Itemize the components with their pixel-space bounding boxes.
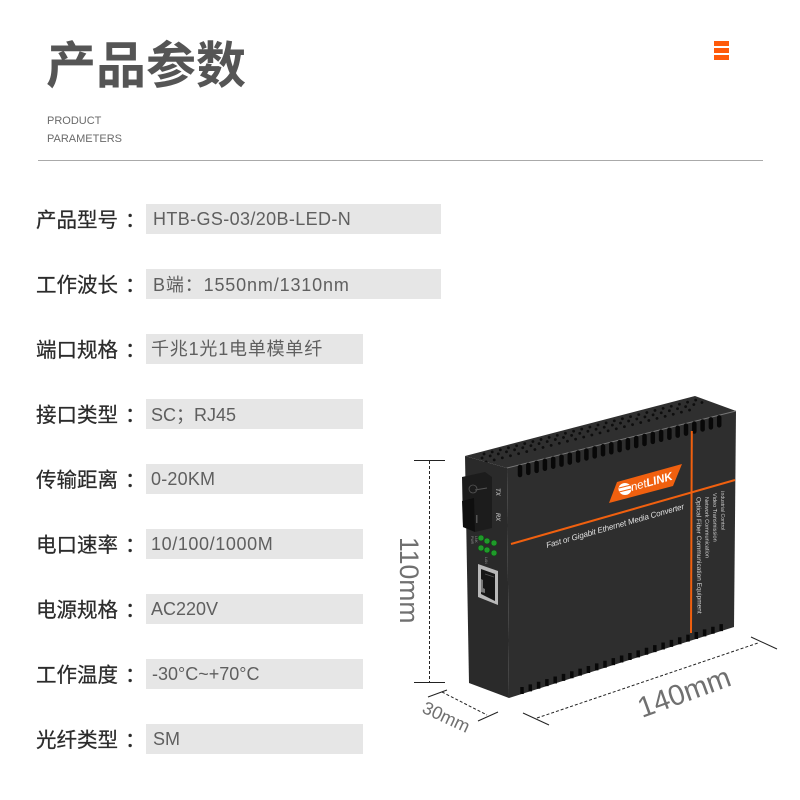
subtitle: product parameters (47, 115, 122, 144)
side text lines: Network Communication (703, 497, 710, 558)
dimension: width 140mm: 140mm (633, 661, 735, 725)
logo badge (609, 464, 682, 503)
row: electrical port speed (36, 528, 363, 559)
row: operating temperature: 工作温度 ： (36, 658, 146, 688)
left side face (465, 456, 509, 698)
row: operating temperature: -30°C~+70°C (152, 664, 259, 684)
product illustration with dimensions (394, 396, 778, 737)
dimension: depth 30mm: 30mm (419, 697, 473, 737)
row: fiber type: 光纤类型 ： (36, 722, 146, 752)
top face (465, 396, 736, 468)
highlight edge (507, 411, 736, 468)
product name text: Fast or Gigabit Ethernet Media Converter (545, 502, 685, 550)
row: power spec: 电源规格 ： (36, 592, 146, 622)
row: wavelength: 工作波长 ： (36, 268, 146, 298)
dimension: height 110mm: 110mm (394, 537, 424, 623)
LED labels: PWR (470, 536, 474, 545)
icon: orange menu bars (714, 41, 729, 60)
front bottom vents (522, 624, 721, 694)
row: power spec: AC220V (151, 599, 218, 619)
row: distance: 传输距离 ： (36, 462, 146, 492)
connector labels TX RX: RX (494, 513, 500, 522)
subtitle: product parameters: PRODUCT (47, 115, 101, 127)
row: product model: 产品型号 ： (36, 202, 146, 232)
row: interface type (36, 398, 363, 429)
logo badge: netLINK (630, 471, 675, 494)
row: port spec: 千兆1光1电单模单纤 (151, 339, 323, 359)
orange stripe vertical (690, 431, 693, 633)
dimension: width 140mm (523, 637, 777, 725)
side text lines (695, 491, 725, 614)
row: operating temperature (36, 658, 363, 689)
LED labels (470, 536, 488, 564)
connector labels TX RX: TX (494, 488, 500, 497)
side text lines: Industrial Control (719, 491, 725, 530)
row: fiber type: SM (153, 729, 180, 749)
front top vents (520, 417, 719, 475)
row: wavelength (36, 268, 441, 299)
front face (507, 411, 736, 698)
spec table (36, 202, 441, 754)
LED labels: LNK (474, 536, 478, 543)
connector labels TX RX (494, 488, 500, 522)
dimension: depth 30mm (419, 690, 498, 737)
row: fiber type (36, 722, 363, 754)
side text lines: Optical Fiber Communication Equipment (695, 497, 703, 614)
device: media converter (462, 396, 736, 698)
row: distance: 0-20KM (151, 469, 215, 489)
side text lines: Video Transmission (711, 493, 717, 542)
RJ45 port (478, 564, 498, 605)
row: distance (36, 462, 363, 494)
SC fiber connector (462, 472, 492, 532)
row: electrical port speed: 电口速率 ： (36, 528, 146, 558)
LED indicators (478, 535, 497, 556)
top face vent holes (482, 399, 708, 462)
row: electrical port speed: 10/100/1000M (151, 534, 273, 554)
subtitle: product parameters: PARAMETERS (47, 132, 122, 144)
title: 产品参数 (46, 38, 246, 94)
orange stripe horizontal (511, 480, 735, 544)
row: interface type: 接口类型 ： (36, 398, 146, 428)
LED labels: LAN (484, 557, 488, 564)
header divider (38, 160, 763, 161)
row: port spec: 端口规格 ： (36, 332, 146, 362)
row: power spec (36, 592, 363, 624)
row: port spec (36, 332, 363, 364)
row: wavelength: B端：1550nm/1310nm (153, 271, 350, 297)
row: interface type: SC；RJ45 (151, 401, 236, 427)
row: product model (36, 202, 441, 234)
row: product model: HTB-GS-03/20B-LED-N (153, 209, 351, 229)
